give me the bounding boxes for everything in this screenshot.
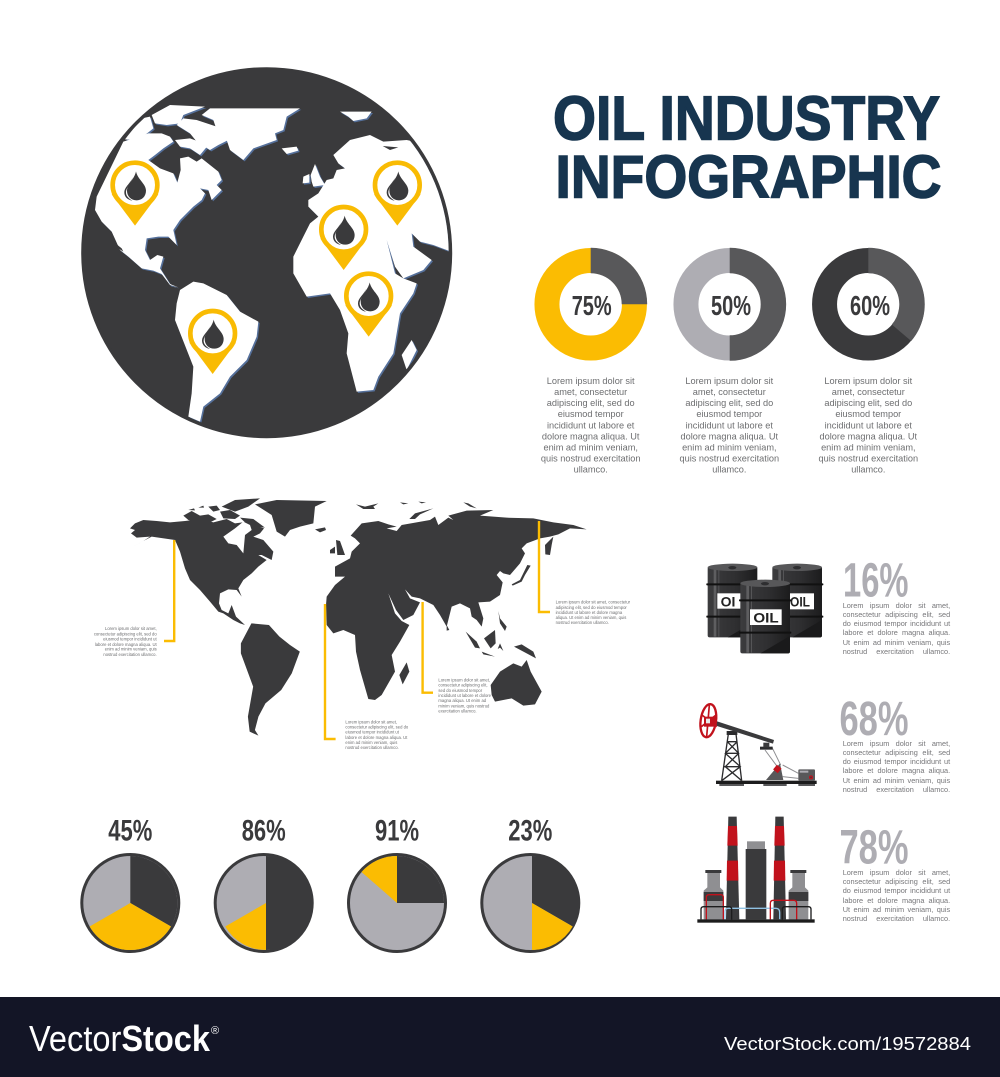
callout text: india: sed do eiusmod tempor [438,688,483,693]
pie 91% [348,814,446,952]
title [553,84,942,210]
callout text: russia: adipiscing elit, sed do eiusmod tempor [556,605,627,610]
pin: central africa [345,274,392,337]
footer logo: VectorStock [29,1018,211,1059]
donut text 3: eiusmod tempor [835,409,901,419]
donut text 3: amet, consectetur [832,387,905,397]
stat text 78%: labore et dolore magna aliqua. [843,896,950,905]
donut 60% [825,248,925,348]
stat text 16%: Ut enim ad minim veniam, quis [843,638,950,647]
callout text: americas: eiusmod tempor incididunt ut [103,636,158,642]
callout text: africa: eiusmod tempor incididunt ut [345,730,400,735]
callout text: americas: consectetur adipiscing elit, sed do [94,631,157,636]
donut text 2: eiusmod tempor [696,409,762,419]
donut text 1: Lorem ipsum dolor sit [547,376,635,386]
callout text: africa: labore et dolore magna aliqua. Ut [345,735,408,740]
callout text: india: magna aliqua. Ut enim ad [438,698,487,703]
callout text: americas [94,626,158,657]
stat text 78%: consectetur adipiscing elit, sed [843,877,950,886]
red crank joint [773,765,782,773]
donut text 2: quis nostrud exercitation [680,454,779,464]
pipes [701,895,811,919]
refinery base [697,919,815,923]
callout text: russia [556,600,631,625]
pie 23% [482,814,579,952]
stat text 68%: labore et dolore magna aliqua. [843,766,950,775]
pin: south america [189,311,236,374]
stat text 16%: do eiusmod tempor incididunt ut [843,619,950,628]
stat text 16%: Lorem ipsum dolor sit amet, [843,600,950,610]
right barrel [771,564,823,637]
stat text 68% [843,738,950,794]
stat text 16% [843,600,950,656]
callout text: russia: aliqua. Ut enim ad minim veniam, quis [556,615,626,620]
callout text: americas: enim ad minim veniam, quis [105,647,157,652]
donut text 3 [819,376,918,474]
callout text: russia: Lorem ipsum dolor sit amet, consectetur [556,600,631,605]
footer registered mark: ® [211,1025,219,1037]
globe outline [83,69,451,437]
icon: refinery [697,817,815,923]
callout text: africa: enim ad minim veniam, quis [345,740,397,745]
callout text: africa: nostrud exercitation ullamco. [345,745,399,750]
callout text: russia: incididunt ut labore et dolore magna [556,610,623,615]
callout line: americas [164,540,174,641]
pie 86%: 86% [242,814,286,848]
donut text 3: incididunt ut labore et [825,420,912,430]
americas and greenland [127,498,327,665]
callout text: india: Lorem ipsum dolor sit amet, [438,678,490,683]
donut text 2: amet, consectetur [693,387,766,397]
stat text 78%: Ut enim ad minim veniam, quis [843,905,950,914]
motor [798,769,815,781]
globe disc [82,68,452,438]
pie 45% [82,814,179,952]
callout line: india [423,602,433,693]
donut text 2: adipiscing elit, sed do [685,398,773,408]
callout text: india: incididunt ut labore et dolore [438,693,492,698]
callout text: americas: nostrud exercitation ullamco. [103,652,157,657]
pie 45%: 45% [108,814,152,848]
callout text: india: exercitation ullamco. [438,708,477,713]
stat text 16%: labore et dolore magna aliqua. [843,628,950,637]
donut text 2: incididunt ut labore et [686,420,773,430]
stat text 78% [843,868,950,923]
left barrel label: OI [721,594,735,610]
globe with pins [82,68,471,438]
donut text 1: eiusmod tempor [558,409,624,419]
callout text: americas: labore et dolore magna aliqua. Ut [95,642,158,647]
callout text: india: minim veniam, quis nostrud [438,703,490,708]
callout text: americas: Lorem ipsum dolor sit amet, [105,626,157,631]
donut text 3: enim ad minim veniam, [821,442,916,452]
callout text: russia: nostrud exercitation ullamco. [556,620,609,625]
left tank [704,870,723,919]
donut text 2: enim ad minim veniam, [682,442,777,452]
stat text 68%: consectetur adipiscing elit, sed [843,748,950,757]
donut 60%: 60% [850,290,890,321]
world map [127,498,587,736]
donut text 2: ullamco. [712,464,746,474]
right chimney [773,817,786,919]
donut text 2: Lorem ipsum dolor sit [685,376,774,386]
stat text 68%: nostrud exercitation ullamco. [843,785,950,794]
right barrel label: OIL [790,594,810,610]
pie 91%: 91% [375,814,419,848]
donut text 1: adipiscing elit, sed do [547,398,635,408]
stat text 68%: Lorem ipsum dolor sit amet, [843,738,950,748]
pie 86% [215,814,313,952]
callout text: africa: consectetur adipiscing elit, sed do [345,725,409,730]
pie 23%: 23% [508,814,552,848]
donut text 2: dolore magna aliqua. Ut [681,432,779,442]
stat text 68%: Ut enim ad minim veniam, quis [843,776,950,785]
horse head [698,703,718,738]
map pins [112,163,421,374]
callout text: africa [345,720,409,750]
donut text 3: Lorem ipsum dolor sit [824,376,913,386]
donut text 1: dolore magna aliqua. Ut [542,432,640,442]
front barrel label: OIL [753,610,779,626]
callout text: india: consectetur adipiscing elit, [438,683,488,688]
central tower [746,841,766,919]
footer image id: VectorStock.com/19572884 [724,1034,971,1054]
stat text 78%: nostrud exercitation ullamco. [843,914,950,923]
callout line: russia [539,521,550,612]
crank [766,763,783,780]
stat text 78%: do eiusmod tempor incididunt ut [843,886,950,895]
donut text 2 [680,376,779,474]
donut text 3: dolore magna aliqua. Ut [820,432,918,442]
callout text: india [438,678,492,713]
pin: north america [112,163,158,226]
donut text 1: amet, consectetur [554,387,627,397]
donut text 3: adipiscing elit, sed do [824,398,912,408]
stat text 68%: do eiusmod tempor incididunt ut [843,757,950,766]
pin: north africa [320,207,367,270]
donut text 1: ullamco. [574,464,608,474]
globe continents [95,105,471,423]
pin: asia [374,163,421,226]
pitman arm [760,743,798,778]
stat text 78%: Lorem ipsum dolor sit amet, [843,868,950,877]
callout text: africa: Lorem ipsum dolor sit amet, [345,720,397,725]
footer bar [0,997,1000,1077]
stat 78%: 78% [840,821,908,874]
donut 75%: 75% [572,290,612,321]
stat 68%: 68% [840,693,908,746]
donut text 1 [541,376,640,474]
title: INFOGRAPHIC [556,144,942,210]
left chimney [726,817,739,919]
donut 50% [686,248,786,361]
right tank [789,870,808,919]
donut text 3: ullamco. [851,464,885,474]
icon: oil barrels [706,564,823,653]
eurasia, africa and oceania [326,502,587,706]
stat 16%: 16% [843,555,908,608]
callout line: africa [325,604,336,739]
stat text 16%: consectetur adipiscing elit, sed [843,610,950,619]
donut 75% [547,248,647,348]
stat text 16%: nostrud exercitation ullamco. [843,647,950,656]
icon: pump jack [698,703,817,786]
left barrel [706,564,759,637]
donut text 1: enim ad minim veniam, [543,442,638,452]
donut text 3: quis nostrud exercitation [819,454,918,464]
front barrel [739,580,791,653]
title: OIL INDUSTRY [553,84,940,154]
derrick [722,732,742,781]
walking beam [715,721,774,744]
donut text 1: incididunt ut labore et [547,420,635,430]
south america [241,623,300,736]
donut 50%: 50% [711,290,751,321]
donut text 1: quis nostrud exercitation [541,454,640,464]
pump base [716,781,817,786]
